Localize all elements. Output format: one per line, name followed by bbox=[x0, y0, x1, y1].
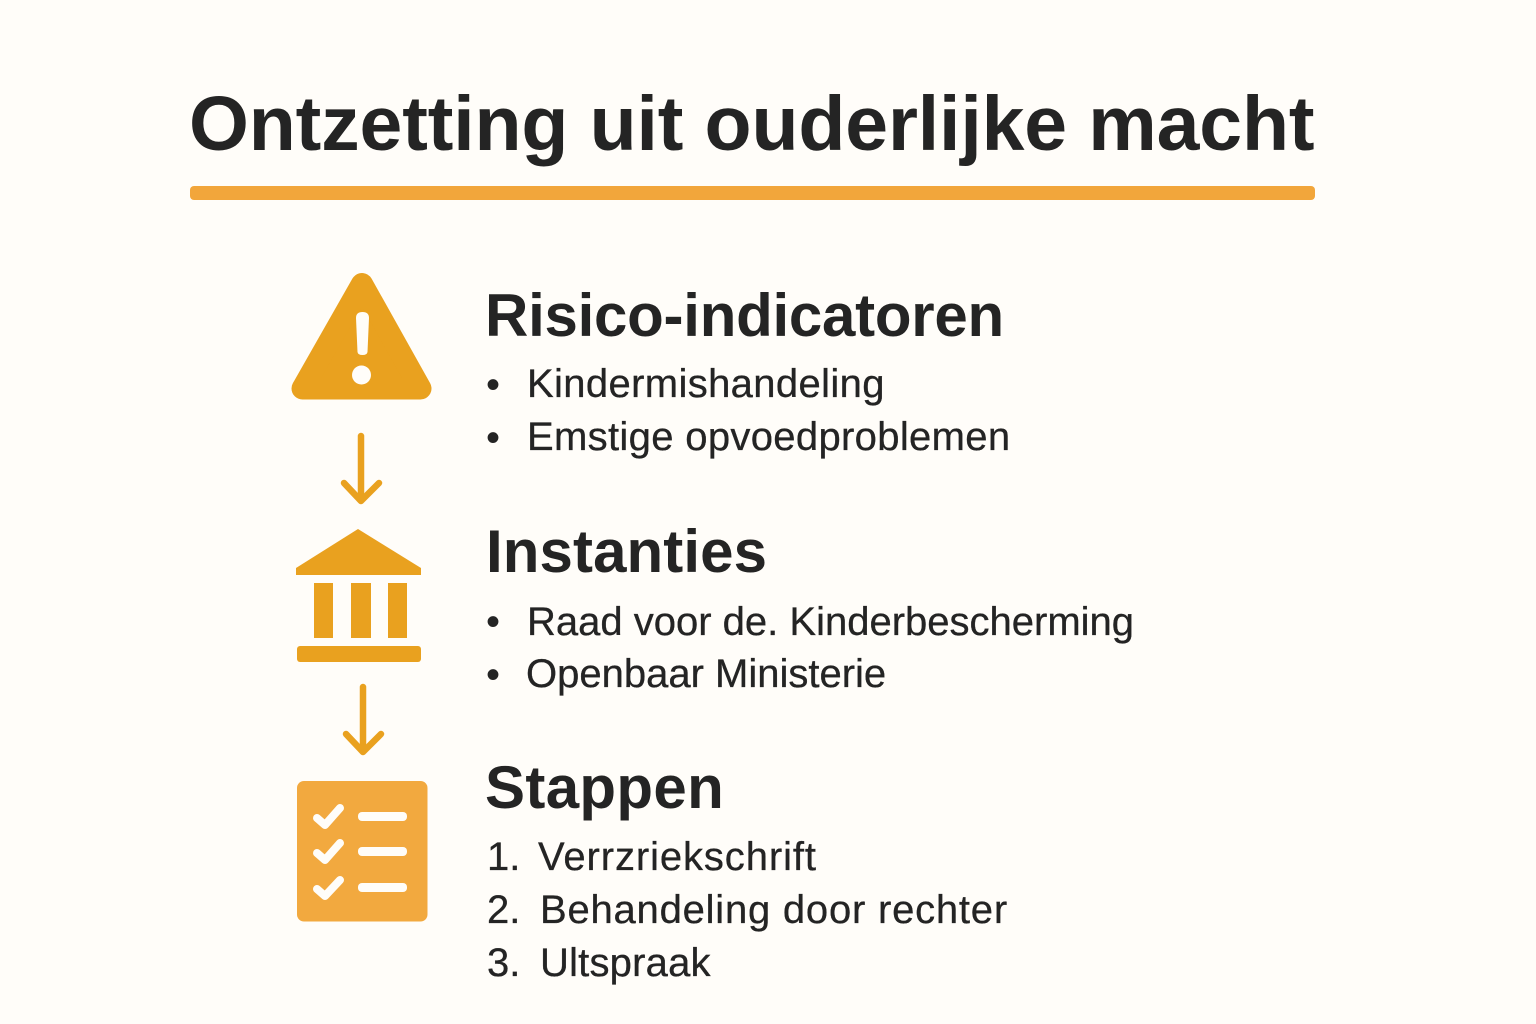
list: steps: 1. bbox=[487, 835, 520, 879]
list: institutions: • bbox=[486, 600, 500, 644]
list: steps: Verrzriekschrift bbox=[538, 835, 817, 879]
heading: Instanties: Instanties bbox=[486, 518, 767, 585]
title: Ontzetting uit ouderlijke macht bbox=[189, 81, 1314, 167]
heading: Stappen: Stappen bbox=[485, 754, 724, 821]
title underline bbox=[190, 186, 1315, 200]
list: institutions: • bbox=[486, 653, 500, 697]
list: risk indicators: • bbox=[486, 363, 500, 407]
list: steps: 3. bbox=[487, 941, 520, 985]
list: steps: 2. bbox=[487, 888, 520, 932]
list: steps: Behandeling door rechter bbox=[540, 888, 1008, 932]
list: institutions: Openbaar Ministerie bbox=[526, 652, 886, 696]
list: risk indicators: Emstige opvoedproblemen bbox=[527, 415, 1010, 459]
list: risk indicators: Kindermishandeling bbox=[527, 362, 885, 406]
list: steps bbox=[487, 835, 1008, 985]
list: institutions: Raad voor de. Kinderbescherming bbox=[527, 600, 1134, 644]
list: steps: Ultspraak bbox=[540, 941, 711, 985]
list: risk indicators: • bbox=[486, 416, 500, 460]
list: risk indicators bbox=[486, 362, 1010, 460]
heading: Risico-indicatoren: Risico-indicatoren bbox=[485, 282, 1004, 349]
list: institutions bbox=[486, 600, 1134, 697]
